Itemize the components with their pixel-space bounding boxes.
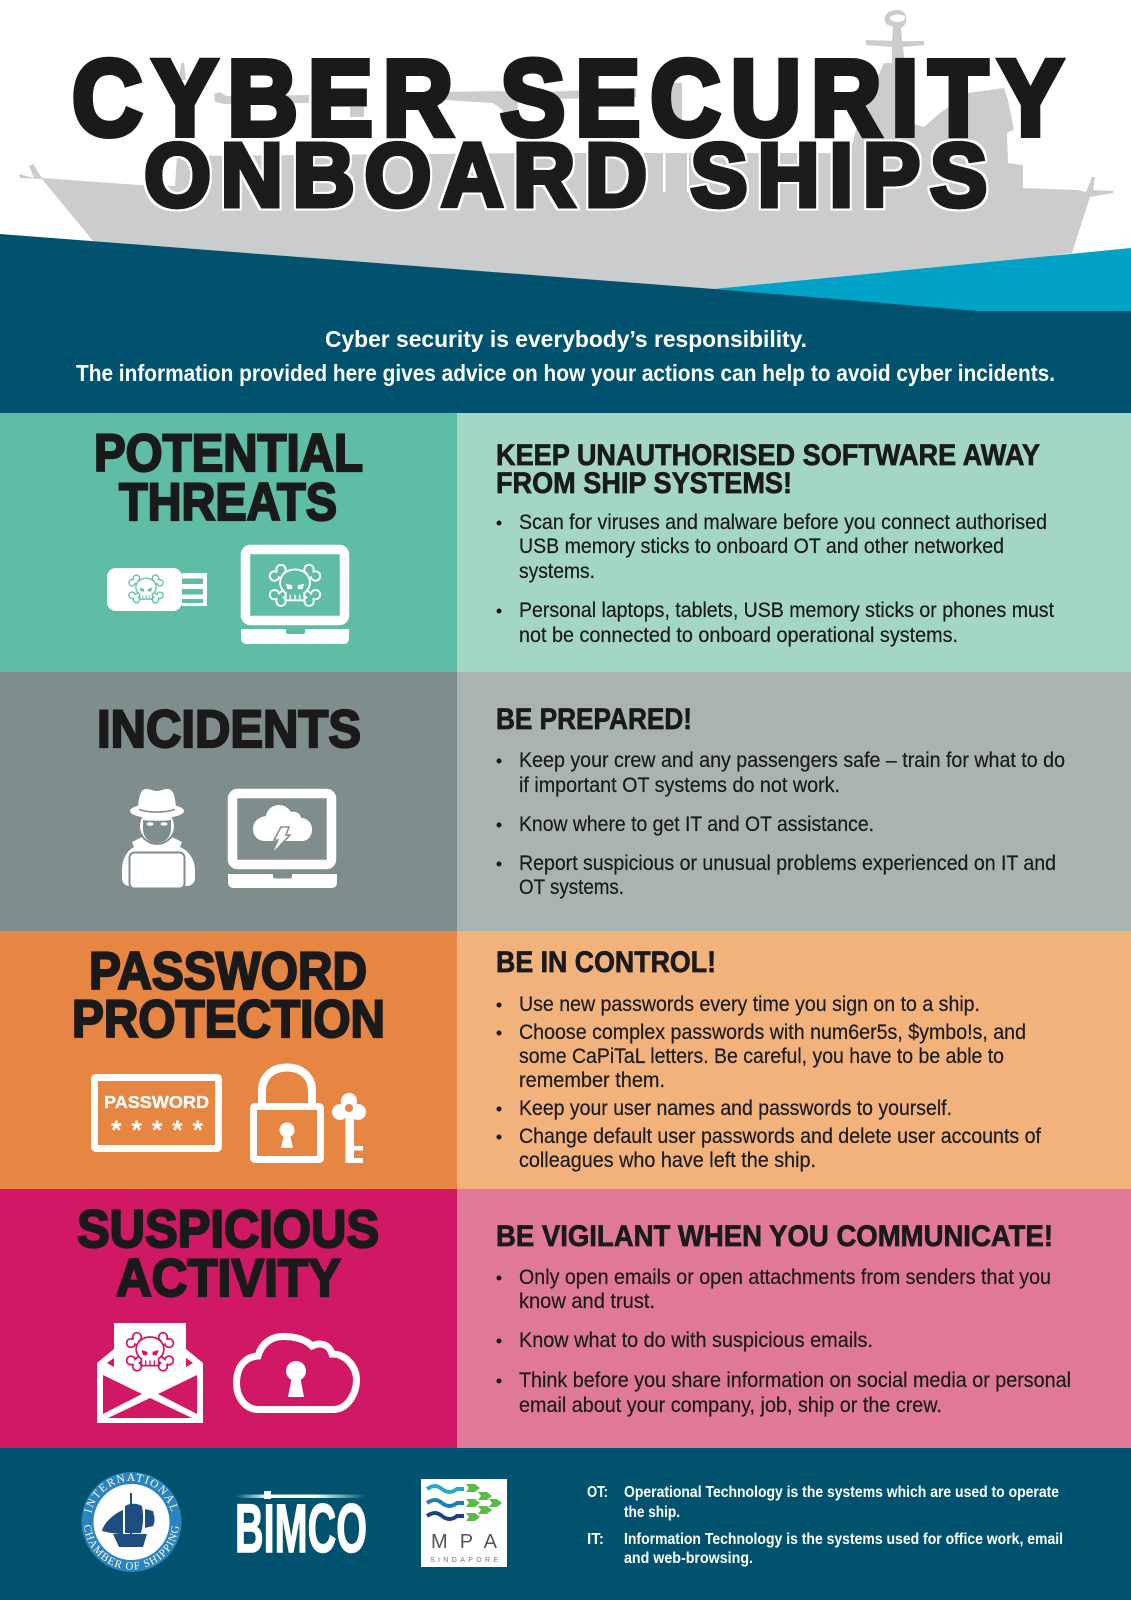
bullet list: Only open emails or open attachments from senders that you xyxy=(519,1265,1051,1289)
glossary: OT and IT definitions: OT: xyxy=(587,1484,608,1501)
panel: suspicious activity xyxy=(0,1189,1131,1448)
bullet list: Choose complex passwords with num6er5s, $ymbo!s, and xyxy=(519,1020,1026,1044)
glossary: OT and IT definitions: IT: xyxy=(587,1531,604,1548)
heading: potential threats: POTENTIAL xyxy=(94,424,363,483)
icon: usb stick with skull xyxy=(107,568,207,611)
heading: potential threats xyxy=(94,424,363,532)
panel: password protection xyxy=(0,931,1131,1189)
heading: suspicious activity xyxy=(77,1200,379,1308)
title line 2: ONBOARD SHIPS xyxy=(144,126,997,226)
icon: key xyxy=(332,1093,366,1163)
footer xyxy=(0,1448,1131,1600)
title xyxy=(72,37,1073,226)
logo: bimco xyxy=(235,1490,367,1567)
ship silhouette xyxy=(19,10,1113,300)
logo: mpa singapore: MPA xyxy=(431,1531,498,1553)
heading: be vigilant: BE VIGILANT WHEN YOU COMMUNICATE! xyxy=(496,1220,1053,1253)
bullet list: if important OT systems do not work. xyxy=(519,773,840,797)
bullet list: Report suspicious or unusual problems experienced on IT and xyxy=(519,851,1056,875)
glossary: OT and IT definitions xyxy=(587,1484,1063,1567)
icon: laptop with storm cloud xyxy=(228,794,337,888)
icon: password box xyxy=(94,1078,218,1148)
bullet list xyxy=(496,992,1041,1172)
heading: password protection: PROTECTION xyxy=(72,990,385,1049)
logo: international chamber of shipping: CHAMBER OF SHIPPING xyxy=(84,1525,178,1570)
icon: laptop with skull xyxy=(241,550,349,644)
glossary: OT and IT definitions: and web-browsing. xyxy=(624,1550,753,1567)
panel: potential threats xyxy=(0,413,1131,672)
glossary: OT and IT definitions: the ship. xyxy=(624,1504,680,1521)
panel: incidents xyxy=(0,672,1131,931)
bullet list: Think before you share information on social media or personal xyxy=(519,1368,1071,1392)
bullet list: remember them. xyxy=(519,1068,665,1092)
heading: keep unauthorised software: FROM SHIP SYSTEMS! xyxy=(496,467,792,500)
wave: light blue xyxy=(714,248,1131,312)
heading: be prepared: BE PREPARED! xyxy=(496,703,692,736)
logo: mpa singapore xyxy=(421,1479,507,1567)
heading: suspicious activity: ACTIVITY xyxy=(116,1249,341,1308)
bullet list: email about your company, job, ship or the crew. xyxy=(519,1393,942,1417)
intro text: Cyber security is everybody’s responsibility. xyxy=(325,326,807,352)
logo: international chamber of shipping xyxy=(82,1472,182,1572)
bullet list: not be connected to onboard operational systems. xyxy=(519,623,958,647)
bullet list: Know what to do with suspicious emails. xyxy=(519,1328,873,1352)
logo: international chamber of shipping: INTERNATIONAL xyxy=(84,1473,178,1514)
heading: password protection: PASSWORD xyxy=(89,942,367,1001)
bullet list: Know where to get IT and OT assistance. xyxy=(519,812,874,836)
heading: incidents: INCIDENTS xyxy=(97,700,361,759)
bullet list: USB memory sticks to onboard OT and other networked xyxy=(519,534,1004,558)
icon: password box: ***** xyxy=(111,1115,203,1145)
icon: hacker xyxy=(122,789,195,888)
intro text: The information provided here gives advice on how your actions can help to avoid cyber incidents. xyxy=(76,360,1055,386)
bullet list: know and trust. xyxy=(519,1289,655,1313)
bullet list: systems. xyxy=(519,559,595,583)
icon: password box: PASSWORD xyxy=(104,1092,209,1112)
icon: cloud with keyhole xyxy=(236,1336,356,1410)
intro text xyxy=(76,326,1055,386)
glossary: OT and IT definitions: Operational Technology is the systems which are used to operate xyxy=(624,1484,1059,1501)
heading: be in control: BE IN CONTROL! xyxy=(496,946,716,979)
bullet list xyxy=(496,1265,1071,1417)
bullet list xyxy=(496,748,1065,899)
header: ship background and waves xyxy=(0,0,1131,413)
heading: suspicious activity: SUSPICIOUS xyxy=(77,1200,379,1259)
icon: envelope with skull xyxy=(97,1323,203,1423)
heading: keep unauthorised software xyxy=(496,439,1040,500)
bullet list: Scan for viruses and malware before you connect authorised xyxy=(519,510,1047,534)
bullet list: OT systems. xyxy=(519,875,624,899)
wave: dark blue xyxy=(0,234,1131,413)
bullet list xyxy=(496,510,1054,647)
logo: bimco: BIMCO xyxy=(235,1490,367,1567)
bullet list: some CaPiTaL letters. Be careful, you have to be able to xyxy=(519,1044,1004,1068)
bullet list: Use new passwords every time you sign on to a ship. xyxy=(519,992,980,1016)
heading: password protection xyxy=(72,942,385,1049)
bullet list: Personal laptops, tablets, USB memory sticks or phones must xyxy=(519,598,1054,622)
bullet list: Keep your user names and passwords to yourself. xyxy=(519,1096,952,1120)
heading: keep unauthorised software: KEEP UNAUTHORISED SOFTWARE AWAY xyxy=(496,439,1040,472)
glossary: OT and IT definitions: Information Technology is the systems used for office work, email xyxy=(624,1531,1063,1548)
bullet list: Change default user passwords and delete user accounts of xyxy=(519,1124,1041,1148)
bullet list: colleagues who have left the ship. xyxy=(519,1148,816,1172)
bullet list: Keep your crew and any passengers safe – train for what to do xyxy=(519,748,1065,772)
heading: potential threats: THREATS xyxy=(119,473,337,532)
logo: mpa singapore: SINGAPORE xyxy=(430,1557,498,1564)
icon: padlock xyxy=(254,1068,320,1160)
